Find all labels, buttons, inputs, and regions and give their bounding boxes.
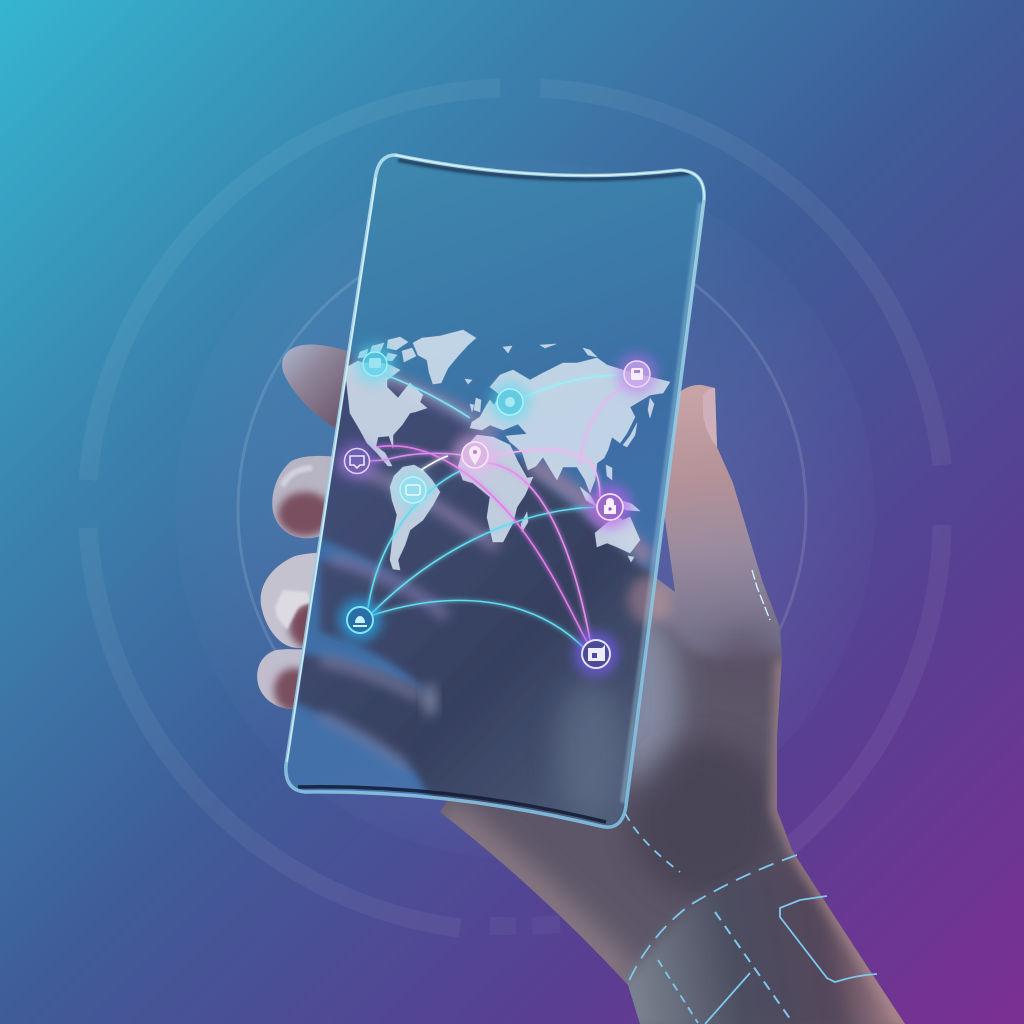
middle fingertip: [272, 456, 332, 538]
concentric rings: [88, 88, 942, 928]
ring fingertip: [260, 552, 318, 648]
hand seen through glass: [295, 350, 668, 840]
web of hand: [652, 582, 672, 626]
node: europe: [490, 382, 530, 422]
middle finger nail: [282, 468, 312, 486]
ring finger mauve side: [322, 552, 347, 622]
skin base: [420, 370, 920, 1024]
little fingertip: [257, 649, 303, 709]
middle finger pad shadow: [278, 492, 332, 536]
left edge highlight: [287, 178, 376, 762]
network nodes: [338, 344, 657, 676]
glass fill: [288, 172, 702, 796]
pink arcs: [580, 385, 625, 465]
little finger top streak: [320, 660, 420, 697]
network arcs: [368, 375, 625, 647]
wrist skin: [624, 860, 905, 1024]
Islands: New Guinea, Japan, Sakhalin, Indonesia, Madagascar, Iceland, UK, Arctic, Tasmania: [465, 344, 654, 562]
palm shadow: [630, 740, 780, 900]
phone frame: [286, 155, 704, 827]
lower edge of palm: [440, 812, 628, 985]
middle finger streak: [340, 462, 497, 547]
South America: [390, 465, 440, 570]
ring finger streak: [330, 558, 447, 616]
index finger streak lower: [530, 463, 650, 560]
Canadian islands: [358, 337, 416, 362]
back of hand and thumb: [420, 370, 920, 1024]
node: location pin: [453, 433, 497, 477]
node: download: [339, 599, 381, 641]
thumb: [656, 384, 782, 659]
index finger streak: [345, 365, 497, 433]
ring fingernail: [275, 590, 313, 630]
node: south america: [394, 471, 432, 509]
node: lock: [588, 485, 632, 529]
phone glass panel: [288, 172, 702, 826]
Africa: [458, 435, 533, 542]
Eurasia: [470, 358, 670, 493]
cyan arcs: [386, 375, 470, 418]
lit side beside phone: [611, 610, 679, 790]
wrist circuit lines: [625, 570, 877, 1024]
rim inner highlight: [395, 155, 704, 200]
Greenland: [413, 330, 476, 384]
knuckle shadow: [714, 625, 776, 664]
palm and fingers silhouette: [295, 350, 660, 840]
node: canada: [355, 344, 395, 384]
crotch highlight: [424, 684, 436, 716]
right tan patch: [628, 576, 668, 624]
North America: [345, 361, 427, 466]
node: calendar: [574, 632, 618, 676]
node: americas left: [338, 442, 376, 480]
right edge light: [777, 660, 905, 1024]
top inner shadow: [398, 160, 690, 179]
index fingertip: [282, 344, 365, 428]
lower right light patch: [556, 680, 624, 820]
node: russia: [617, 354, 657, 394]
thumb nail: [703, 388, 717, 447]
hand: [250, 344, 920, 1024]
right edge band: [623, 203, 701, 803]
world map: [345, 330, 670, 570]
outer rim: [286, 155, 704, 827]
ring finger pad shadow: [284, 602, 310, 648]
little finger pad shadow: [268, 662, 300, 709]
bottom inner shadow: [298, 787, 606, 822]
Australia: [595, 517, 640, 553]
little finger lower edge: [320, 716, 408, 768]
